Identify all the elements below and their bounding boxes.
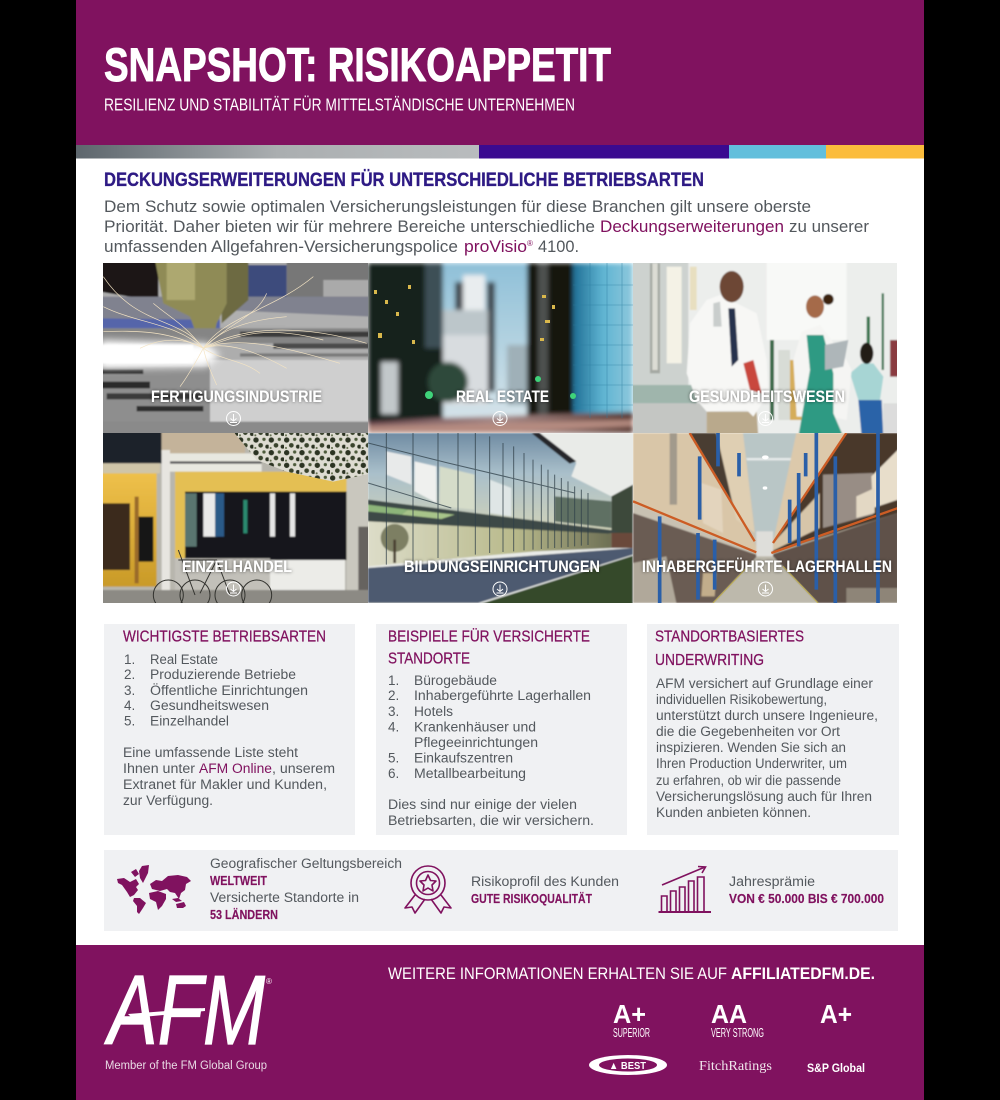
panel paragraph: Versicherungslösung auch für Ihren — [656, 789, 872, 804]
icon: download Bildungseinrichtungen — [493, 582, 507, 596]
numbered list: 6. — [388, 766, 399, 781]
numbered list: 4. — [388, 720, 399, 734]
icon: world map — [117, 865, 191, 914]
numbered list: Öffentliche Einrichtungen — [150, 683, 308, 698]
footer band — [76, 945, 924, 1100]
logo: S&P Global: S&P Global — [807, 1061, 865, 1075]
text: Risikoprofil: Risikoprofil des Kunden — [471, 874, 619, 889]
subtitle: RESILIENZ UND STABILITÄT FÜR MITTELSTÄNDISCHE UNTERNEHMEN — [104, 94, 575, 114]
icon: download Gesundheitswesen — [758, 412, 772, 426]
text: Geltungsbereich — [210, 856, 402, 922]
tile label: Einzelhandel: EINZELHANDEL — [182, 557, 292, 576]
panel note: Ihnen unter — [123, 761, 196, 776]
rating: Fitch — [711, 999, 764, 1040]
panel paragraph: unterstützt durch unsere Ingenieure, — [656, 708, 878, 723]
panel: versicherte Standorte — [376, 624, 627, 835]
photo tile: Gesundheitswesen — [630, 260, 902, 437]
footer call to action: AFFILIATEDFM.DE. — [731, 965, 875, 983]
AFM logo: ® — [266, 977, 272, 986]
text: Geltungsbereich: Geografischer Geltungsbereich — [210, 856, 402, 871]
panel paragraph: die die Gegebenheiten vor Ort — [656, 724, 840, 739]
numbered list: Einzelhandel — [150, 714, 229, 728]
panel note — [123, 745, 335, 808]
colour stripe — [76, 145, 924, 158]
numbered list: Gesundheitswesen — [150, 698, 269, 713]
panel note: Betriebsarten, die wir versichern. — [388, 813, 594, 828]
photo tile: Inhabergeführte Lagerhallen — [633, 433, 898, 603]
panel paragraph: individuellen Risikobewertung, — [656, 692, 827, 707]
numbered list: Hotels — [414, 704, 453, 719]
numbered list — [124, 652, 308, 728]
panel note: , unserem — [272, 761, 335, 776]
photo tile: Einzelhandel — [100, 432, 372, 610]
numbered list: Bürogebäude — [414, 673, 497, 688]
intro text: proVisio — [464, 238, 527, 256]
footer call to action: WEITERE INFORMATIONEN ERHALTEN SIE AUF — [388, 965, 727, 983]
panel note: Dies sind nur einige der vielen — [388, 797, 577, 812]
title: SNAPSHOT: RISIKOAPPETIT — [104, 38, 611, 91]
rating: AM Best: SUPERIOR — [613, 1025, 650, 1040]
text: Geltungsbereich: 53 LÄNDERN — [210, 907, 278, 922]
panel note: Extranet für Makler und Kunden, — [123, 777, 327, 792]
icon: award ribbon — [405, 866, 451, 913]
rating: Fitch: AA — [711, 999, 747, 1029]
numbered list: Inhabergeführte Lagerhallen — [414, 688, 591, 703]
member line: Member of the FM Global Group — [105, 1060, 267, 1072]
text: Risikoprofil: GUTE RISIKOQUALITÄT — [471, 891, 592, 906]
rating: S&P: A+ — [820, 999, 852, 1029]
numbered list: 1. — [124, 652, 135, 667]
text: Jahresprämie: VON € 50.000 BIS € 700.000 — [729, 892, 884, 906]
numbered list: 3. — [124, 683, 135, 698]
photo tile: Fertigungsindustrie — [100, 260, 372, 437]
numbered list — [388, 673, 591, 781]
panel paragraph: AFM versichert auf Grundlage einer — [656, 676, 873, 691]
rating: AM Best: A+ — [613, 999, 646, 1029]
text: Jahresprämie — [729, 874, 884, 906]
panel heading: STANDORTBASIERTES — [655, 628, 804, 646]
panel note — [388, 797, 594, 828]
photo tile: Real Estate — [368, 263, 633, 433]
panel paragraph: Kunden anbieten können. — [656, 805, 811, 820]
rating: Fitch: VERY STRONG — [711, 1025, 764, 1040]
numbered list: Produzierende Betriebe — [150, 667, 296, 682]
intro text — [104, 198, 870, 256]
header band — [76, 0, 924, 145]
AFM logo: AFM — [104, 955, 265, 1065]
intro text: Priorität. Daher bieten wir für mehrere Bereiche unterschiedliche — [104, 218, 595, 236]
intro text: 4100. — [538, 238, 579, 256]
numbered list: 5. — [388, 750, 399, 766]
numbered list: 3. — [388, 704, 399, 719]
icon: download Lagerhallen — [758, 582, 772, 596]
icon: download Real Estate — [493, 412, 507, 426]
numbered list: Real Estate — [150, 652, 218, 667]
tile label: Inhabergeführte Lagerhallen: INHABERGEFÜHRTE LAGERHALLEN — [642, 557, 892, 576]
facts strip — [104, 850, 898, 931]
rating: AM Best — [613, 999, 650, 1040]
panel heading — [388, 628, 590, 668]
panel heading: STANDORTE — [388, 650, 470, 668]
panel note: Eine umfassende Liste steht — [123, 745, 298, 760]
numbered list: 4. — [124, 698, 135, 713]
panel paragraph: inspizieren. Wenden Sie sich an — [656, 740, 846, 755]
panel: standortbasiertes Underwriting — [647, 624, 899, 835]
icon: download Einzelhandel — [226, 582, 240, 596]
panel paragraph: zu erfahren, ob wir die passende — [656, 773, 841, 788]
tile label: Gesundheitswesen: GESUNDHEITSWESEN — [689, 387, 845, 406]
text: Geltungsbereich: Versicherte Standorte in — [210, 890, 359, 905]
intro text: zu unserer — [789, 218, 870, 236]
numbered list: 2. — [388, 688, 399, 703]
numbered list: 5. — [124, 714, 135, 728]
numbered list: Krankenhäuser und — [414, 720, 536, 734]
panel note: AFM Online — [199, 761, 272, 776]
section heading: DECKUNGSERWEITERUNGEN FÜR UNTERSCHIEDLICHE BETRIEBSARTEN — [104, 168, 704, 191]
intro text: Deckungserweiterungen — [600, 218, 784, 236]
panel heading: BEISPIELE FÜR VERSICHERTE — [388, 628, 590, 646]
panel note: zur Verfügung. — [123, 793, 213, 808]
panel paragraph — [656, 676, 878, 820]
icon: download Fertigungsindustrie — [226, 412, 240, 426]
intro text: ® — [527, 239, 533, 248]
panel heading — [655, 628, 804, 669]
panel paragraph: Ihren Production Underwriter, um — [656, 756, 847, 771]
tile label: Fertigungsindustrie: FERTIGUNGSINDUSTRIE — [151, 387, 322, 406]
text: Jahresprämie: Jahresprämie — [729, 874, 815, 889]
numbered list: Pflegeeinrichtungen — [414, 735, 538, 750]
intro text: Dem Schutz sowie optimalen Versicherungsleistungen für diese Branchen gilt unsere oberste — [104, 198, 811, 216]
panel: wichtigste Betriebsarten — [104, 624, 355, 835]
numbered list: Metallbearbeitung — [414, 766, 526, 781]
tile label: Bildungseinrichtungen: BILDUNGSEINRICHTUNGEN — [404, 557, 600, 576]
tile label: Real Estate: REAL ESTATE — [456, 387, 549, 406]
logo: Fitch Ratings: FitchRatings — [699, 1058, 772, 1073]
numbered list: 2. — [124, 667, 135, 682]
numbered list: Einkaufszentren — [414, 750, 513, 766]
logo: AM Best — [589, 1055, 667, 1075]
text: Geltungsbereich: WELTWEIT — [210, 874, 267, 888]
numbered list: 1. — [388, 673, 399, 688]
icon: growth chart — [658, 866, 711, 912]
logo: AM Best: ▲ BEST — [609, 1060, 647, 1072]
photo tile: Bildungseinrichtungen — [368, 433, 635, 605]
panel heading: WICHTIGSTE BETRIEBSARTEN — [123, 628, 326, 646]
text: Risikoprofil — [471, 874, 619, 906]
intro text: umfassenden Allgefahren-Versicherungspolice — [104, 238, 458, 256]
panel heading: UNDERWRITING — [655, 652, 764, 669]
